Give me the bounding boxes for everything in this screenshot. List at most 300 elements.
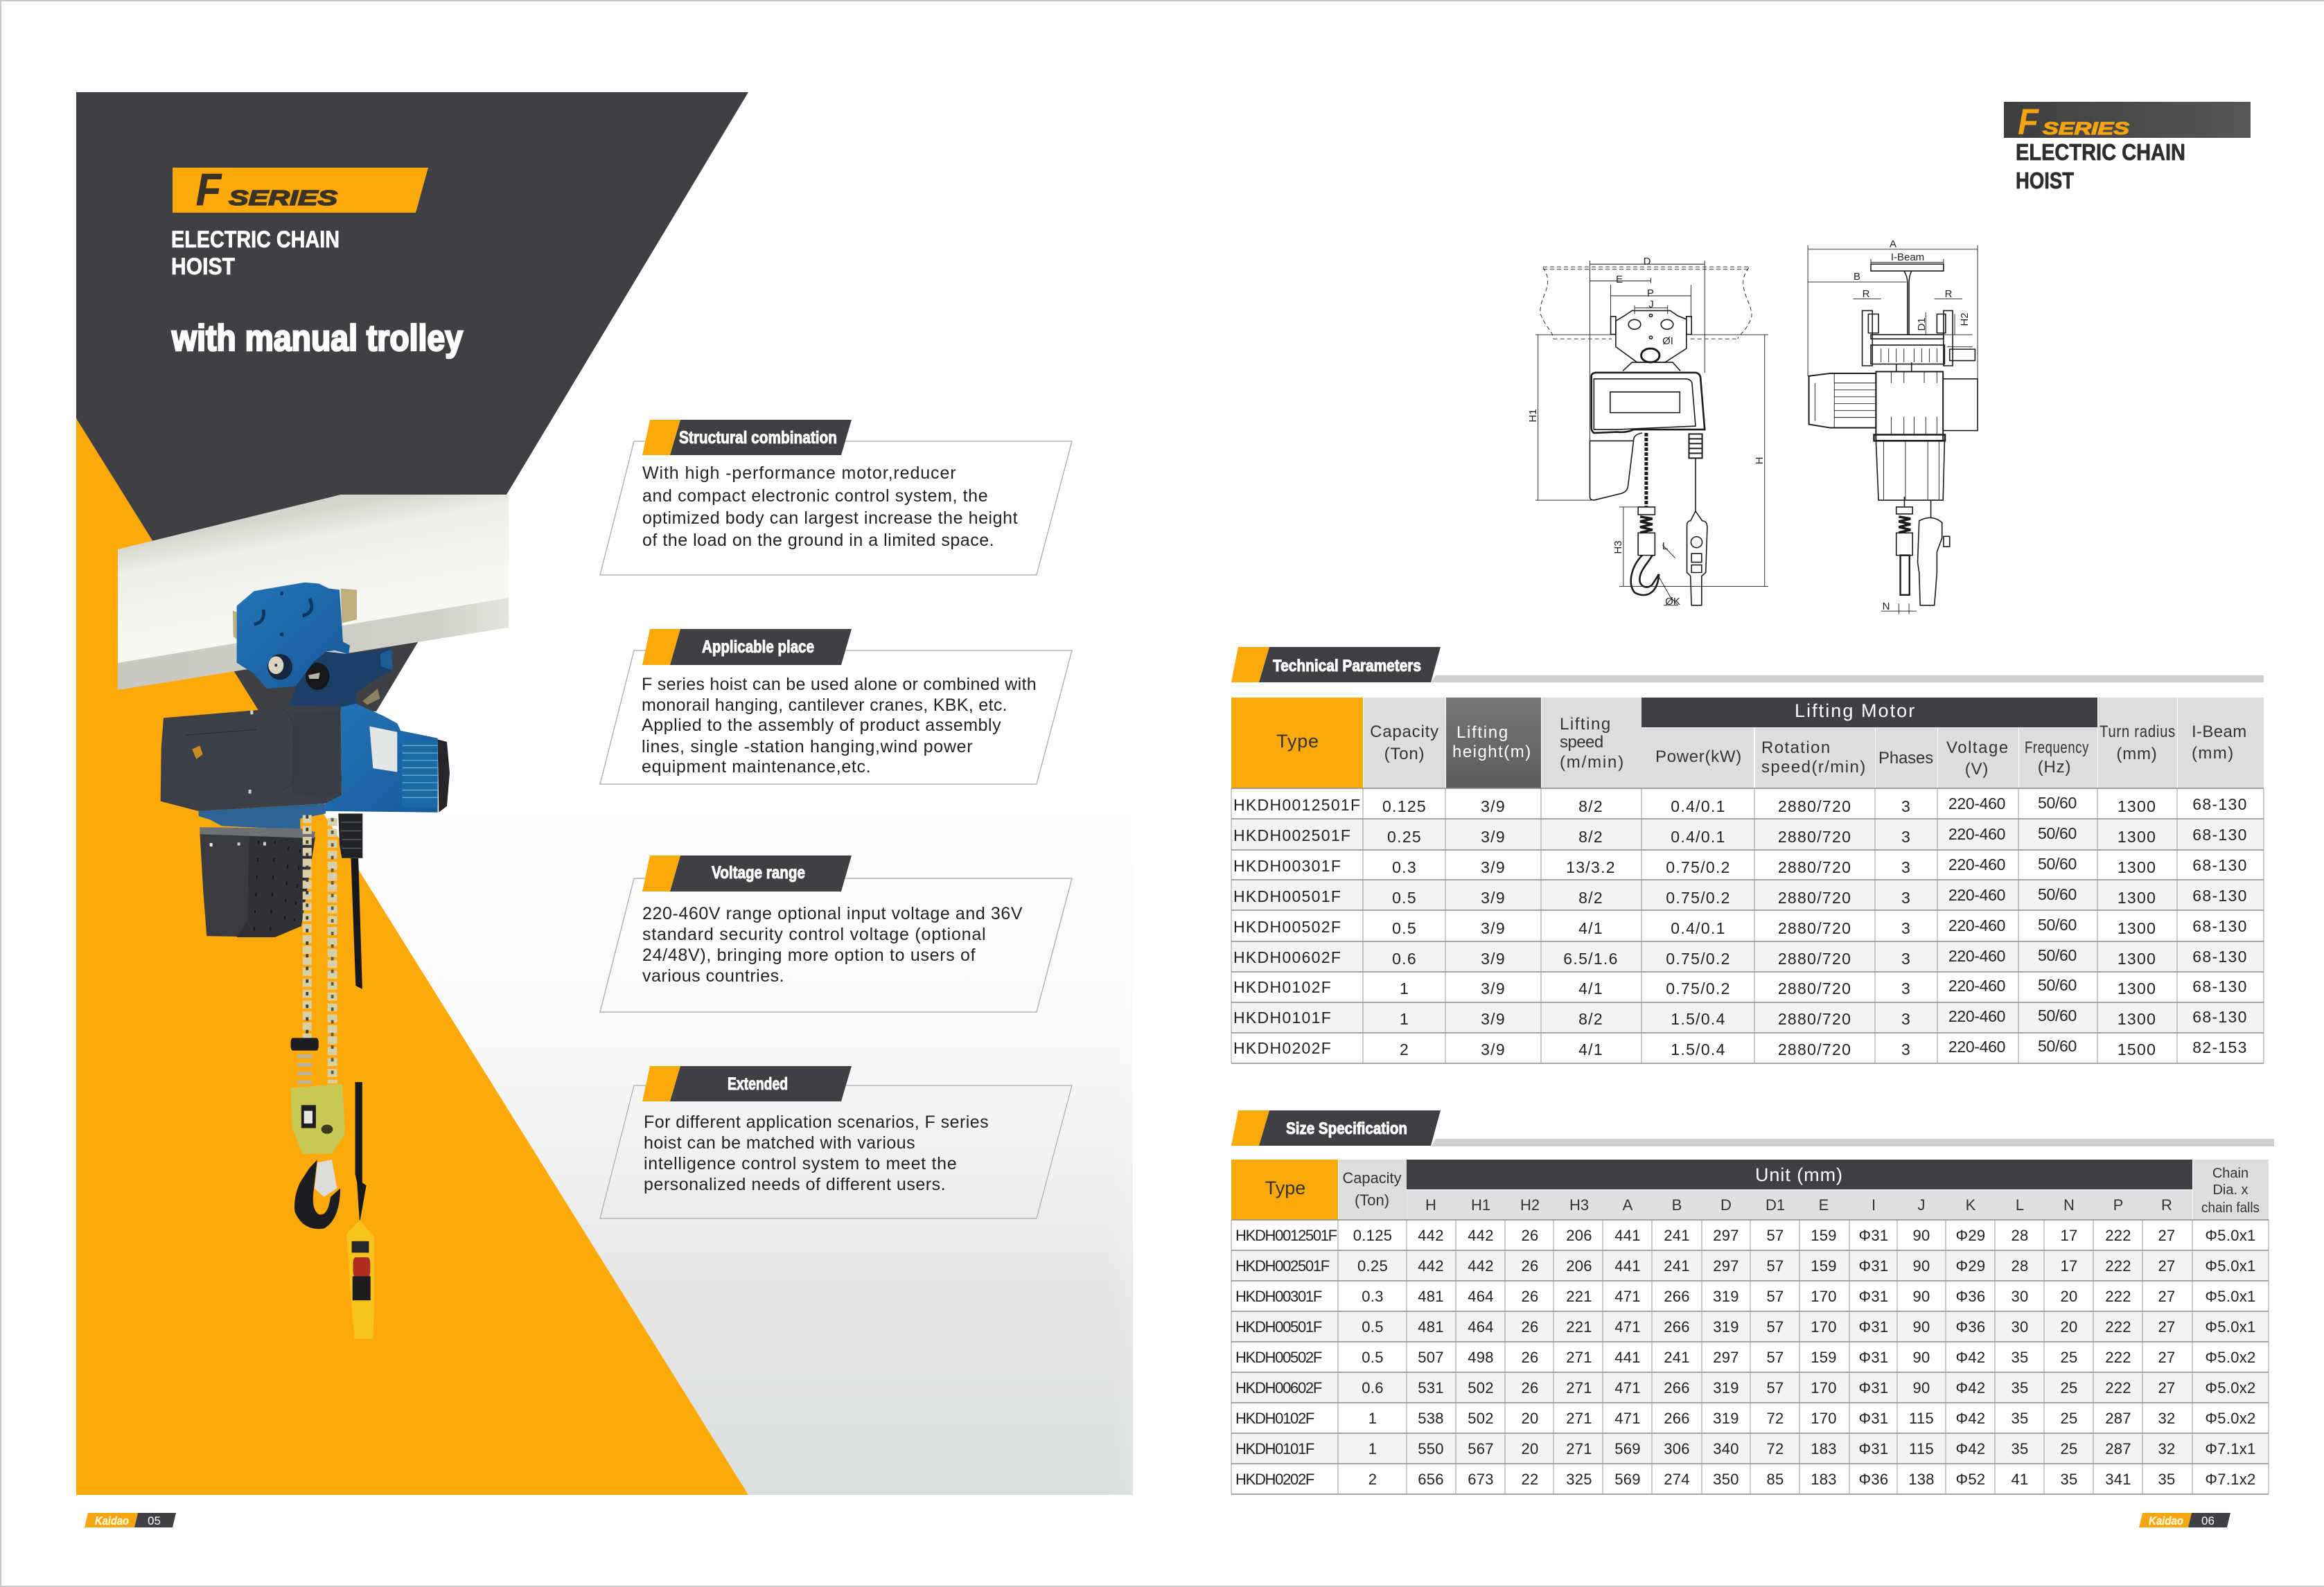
- row HKDH00502F: 35: [2011, 1349, 2029, 1366]
- image: blue electric chain hoist with trolley: [161, 583, 450, 1339]
- row HKDH00602F: 26: [1521, 1379, 1539, 1397]
- row HKDH00502F: 0.4/0.1: [1671, 919, 1726, 937]
- row HKDH00301F: 20: [2060, 1288, 2078, 1305]
- table header: [1231, 1160, 2269, 1220]
- table header: B: [1672, 1196, 1682, 1214]
- row HKDH00602F: HKDH00602F: [1235, 1379, 1322, 1397]
- row HKDH00502F: 2880/720: [1778, 919, 1851, 937]
- row HKDH00501F: 0.5: [1392, 889, 1417, 907]
- table header: speed: [1560, 733, 1604, 752]
- callout: extended: Extended: [728, 1074, 788, 1094]
- row HKDH002501F: 8/2: [1578, 828, 1603, 846]
- row HKDH0202F: 1500: [2118, 1040, 2156, 1058]
- callout: applicable place: monorail hanging, cantilever cranes, KBK, etc.: [642, 695, 1007, 715]
- row HKDH0202F: HKDH0202F: [1233, 1039, 1332, 1057]
- row HKDH0202F: 1.5/0.4: [1671, 1040, 1726, 1058]
- callout: extended: [600, 1066, 1072, 1218]
- row HKDH00602F: 220-460: [1948, 947, 2005, 965]
- callout: voltage range: various countries.: [642, 966, 784, 986]
- row HKDH00301F: 222: [2105, 1288, 2131, 1305]
- table header: Capacity: [1343, 1169, 1401, 1187]
- row HKDH00502F: 3: [1901, 919, 1911, 937]
- table header: R: [2161, 1196, 2172, 1214]
- row HKDH00501F: 481: [1418, 1318, 1444, 1336]
- row HKDH00502F: 3/9: [1481, 919, 1506, 937]
- row HKDH00301F: 170: [1811, 1288, 1837, 1305]
- row HKDH0101F: [1235, 1440, 2256, 1457]
- row HKDH00501F: 1300: [2118, 889, 2156, 907]
- row HKDH002501F: 17: [2060, 1257, 2078, 1275]
- row HKDH002501F: 442: [1418, 1257, 1444, 1275]
- row HKDH00301F: 90: [1912, 1288, 1930, 1305]
- footer: page 06 tag: Kaidao: [2149, 1514, 2183, 1527]
- row HKDH0012501F: 8/2: [1578, 797, 1603, 815]
- row HKDH0012501F: 3/9: [1481, 797, 1506, 815]
- row HKDH00301F: HKDH00301F: [1233, 857, 1341, 875]
- callout: structural combination: [600, 420, 1072, 575]
- panel: left page background: [76, 92, 1133, 1495]
- drawing dimension labels: L: [1662, 540, 1668, 552]
- callout: applicable place: F series hoist can be used alone or combined with: [642, 675, 1037, 694]
- row HKDH00502F: 27: [2158, 1349, 2176, 1366]
- row HKDH0101F: 3: [1901, 1010, 1911, 1028]
- row HKDH00602F: 3/9: [1481, 950, 1506, 968]
- row HKDH00602F: Φ5.0x2: [2205, 1379, 2256, 1397]
- row HKDH00602F: 271: [1566, 1379, 1592, 1397]
- row HKDH00501F: 0.75/0.2: [1666, 889, 1731, 907]
- row HKDH0101F: 20: [1521, 1440, 1539, 1457]
- row HKDH002501F: 3/9: [1481, 828, 1506, 846]
- row HKDH0101F: 550: [1418, 1440, 1444, 1457]
- drawing dimension labels: D: [1644, 256, 1651, 267]
- row HKDH002501F: 220-460: [1948, 825, 2005, 843]
- subheading: with manual trolley: with manual trolley: [171, 318, 463, 359]
- callout: extended: personalized needs of different users.: [644, 1175, 946, 1194]
- row HKDH0012501F: 159: [1811, 1227, 1837, 1244]
- row HKDH00602F: Φ31: [1859, 1379, 1888, 1397]
- callout: structural combination: Structural combination: [679, 428, 837, 447]
- row HKDH00501F: 3/9: [1481, 889, 1506, 907]
- row HKDH00602F: 0.6: [1392, 950, 1417, 968]
- row HKDH00602F: [1233, 946, 2248, 968]
- orange diagonal shape: [76, 418, 748, 1495]
- row HKDH00501F: 464: [1468, 1318, 1494, 1336]
- drawing dimension labels: N: [1883, 601, 1890, 612]
- row HKDH00301F: 0.3: [1392, 858, 1417, 876]
- heading: electric chain hoist: ELECTRIC CHAIN: [171, 227, 340, 253]
- row HKDH0101F: 68-130: [2192, 1008, 2248, 1026]
- row HKDH00301F: HKDH00301F: [1235, 1288, 1322, 1305]
- row HKDH00602F: 531: [1418, 1379, 1444, 1397]
- series tag: F series top right: [2004, 102, 2251, 143]
- row HKDH00502F: [1235, 1349, 2256, 1366]
- row HKDH0012501F: 28: [2011, 1227, 2029, 1244]
- row HKDH0101F: 72: [1766, 1440, 1784, 1457]
- callout: voltage range: standard security control voltage (optional: [642, 925, 986, 944]
- drawing dimension labels: H3: [1612, 540, 1624, 554]
- row HKDH0101F: 115: [1909, 1440, 1934, 1457]
- row HKDH0202F: 50/60: [2038, 1037, 2077, 1055]
- drawing dimension labels: P: [1647, 287, 1654, 299]
- row HKDH002501F: 0.25: [1387, 828, 1422, 846]
- row HKDH00602F: 266: [1664, 1379, 1690, 1397]
- table header: Type: [1276, 731, 1319, 752]
- drawing dimension labels: H: [1754, 457, 1766, 464]
- callout: applicable place: [600, 629, 1072, 784]
- callout: voltage range: 220-460V range optional input voltage and 36V: [642, 904, 1023, 923]
- series tag: F series top right: SERIES: [2043, 119, 2129, 139]
- row HKDH0101F: 3/9: [1481, 1010, 1506, 1028]
- row HKDH00602F: Φ42: [1956, 1379, 1985, 1397]
- table: size specification: [1231, 1160, 2269, 1494]
- row HKDH00602F: 471: [1614, 1379, 1641, 1397]
- row HKDH00501F: 68-130: [2192, 887, 2248, 905]
- drawing dimension labels: H1: [1527, 409, 1539, 423]
- row HKDH0102F: 35: [2011, 1410, 2029, 1427]
- row HKDH0101F: 32: [2158, 1440, 2176, 1457]
- row HKDH002501F: 57: [1766, 1257, 1784, 1275]
- footer: page 05 tag: [85, 1513, 176, 1527]
- row HKDH00501F: 471: [1614, 1318, 1641, 1336]
- row HKDH002501F: 2880/720: [1778, 828, 1851, 846]
- table: technical parameters: [1231, 698, 2264, 1063]
- row HKDH00502F: 90: [1912, 1349, 1930, 1366]
- table header: I: [1872, 1196, 1876, 1214]
- table header: J: [1918, 1196, 1925, 1214]
- row HKDH00502F: 220-460: [1948, 916, 2005, 934]
- row HKDH0202F: 350: [1713, 1471, 1739, 1488]
- row HKDH0012501F: 442: [1468, 1227, 1494, 1244]
- row HKDH00502F: 441: [1614, 1349, 1641, 1366]
- row HKDH00502F: 507: [1418, 1349, 1444, 1366]
- row HKDH00301F: 221: [1566, 1288, 1592, 1305]
- row HKDH0101F: 220-460: [1948, 1007, 2005, 1025]
- hook: [294, 1160, 340, 1229]
- heading: electric chain hoist top right: HOIST: [2016, 168, 2074, 193]
- table header: (Ton): [1384, 745, 1425, 763]
- row HKDH0012501F: 27: [2158, 1227, 2176, 1244]
- row HKDH00301F: 26: [1521, 1288, 1539, 1305]
- alternate row shading: [1231, 1250, 2269, 1464]
- row HKDH0102F: Φ31: [1859, 1410, 1888, 1427]
- row HKDH00502F: Φ42: [1956, 1349, 1985, 1366]
- row HKDH0202F: 82-153: [2192, 1038, 2248, 1056]
- row HKDH0102F: 32: [2158, 1410, 2176, 1427]
- callout: applicable place: Applicable place: [702, 637, 814, 657]
- row HKDH0102F: Φ5.0x2: [2205, 1410, 2256, 1427]
- row HKDH0101F: 1.5/0.4: [1671, 1010, 1726, 1028]
- row HKDH0012501F: 441: [1614, 1227, 1641, 1244]
- technical drawing: side view: [1808, 245, 1978, 614]
- row HKDH00602F: 68-130: [2192, 948, 2248, 966]
- drawing dimension labels: E: [1616, 274, 1623, 285]
- drawing dimension labels: D1: [1916, 317, 1928, 331]
- blue strip under control box: [199, 804, 326, 830]
- row HKDH0012501F: 17: [2060, 1227, 2078, 1244]
- row HKDH00602F: 2880/720: [1778, 950, 1851, 968]
- row HKDH002501F: 90: [1912, 1257, 1930, 1275]
- row HKDH0202F: 183: [1811, 1471, 1837, 1488]
- drawing dimension labels: H2: [1959, 312, 1971, 326]
- row HKDH00301F: 1300: [2118, 858, 2156, 876]
- row HKDH00502F: 4/1: [1578, 919, 1603, 937]
- table header: A: [1623, 1196, 1633, 1214]
- power cable: [351, 858, 362, 989]
- row HKDH00501F: 27: [2158, 1318, 2176, 1336]
- row HKDH0202F: 673: [1468, 1471, 1494, 1488]
- row HKDH0102F: 3: [1901, 979, 1911, 998]
- row HKDH002501F: [1233, 824, 2248, 846]
- row HKDH00502F: 26: [1521, 1349, 1539, 1366]
- row HKDH0102F: HKDH0102F: [1235, 1410, 1314, 1427]
- callout: structural combination: With high -performance motor,reducer: [642, 463, 956, 483]
- table header: H3: [1569, 1196, 1589, 1214]
- row HKDH00301F: 0.75/0.2: [1666, 858, 1731, 876]
- row HKDH0102F: 0.75/0.2: [1666, 979, 1731, 998]
- row HKDH0202F: [1233, 1037, 2248, 1058]
- row HKDH0101F: [1233, 1007, 2248, 1028]
- table header: Frequency: [2025, 738, 2089, 757]
- row HKDH0102F: 319: [1713, 1410, 1739, 1427]
- row HKDH00301F: 220-460: [1948, 855, 2005, 874]
- heading: electric chain hoist top right: ELECTRIC CHAIN: [2016, 139, 2185, 165]
- row HKDH0012501F: [1235, 1227, 2256, 1244]
- title block: F series banner: SERIES: [229, 186, 337, 210]
- row HKDH00301F: 3/9: [1481, 858, 1506, 876]
- row HKDH00502F: 1300: [2118, 919, 2156, 937]
- row HKDH0101F: 35: [2011, 1440, 2029, 1457]
- row HKDH0012501F: 442: [1418, 1227, 1444, 1244]
- row HKDH0102F: 1: [1400, 979, 1409, 998]
- row HKDH00502F: HKDH00502F: [1235, 1349, 1322, 1366]
- row HKDH0101F: 287: [2105, 1440, 2131, 1457]
- bellows: [338, 814, 362, 858]
- row HKDH002501F: 28: [2011, 1257, 2029, 1275]
- row HKDH002501F: 206: [1566, 1257, 1592, 1275]
- row HKDH0101F: HKDH0101F: [1233, 1009, 1332, 1027]
- row HKDH00501F: 222: [2105, 1318, 2131, 1336]
- table header: [1231, 698, 2264, 788]
- table header: K: [1966, 1196, 1976, 1214]
- row HKDH00602F: 35: [2011, 1379, 2029, 1397]
- drawing dimension labels: A: [1890, 238, 1896, 250]
- row HKDH00501F: 90: [1912, 1318, 1930, 1336]
- row HKDH002501F: Φ29: [1956, 1257, 1985, 1275]
- row HKDH00301F: 68-130: [2192, 856, 2248, 874]
- row HKDH002501F: 222: [2105, 1257, 2131, 1275]
- table header: Lifting Motor: [1795, 700, 1915, 721]
- row HKDH00602F: 3: [1901, 950, 1911, 968]
- row HKDH002501F: 3: [1901, 828, 1911, 846]
- row HKDH0102F: 50/60: [2038, 976, 2077, 994]
- heading: electric chain hoist: [171, 227, 340, 280]
- row HKDH0102F: 20: [1521, 1410, 1539, 1427]
- row HKDH00502F: 25: [2060, 1349, 2078, 1366]
- table header: E: [1819, 1196, 1829, 1214]
- footer: page 06 tag: [2139, 1513, 2230, 1527]
- row HKDH00501F: [1235, 1318, 2256, 1336]
- row HKDH0202F: HKDH0202F: [1235, 1471, 1314, 1488]
- row HKDH002501F: 297: [1713, 1257, 1739, 1275]
- row HKDH0101F: 569: [1614, 1440, 1641, 1457]
- footer: page 06 tag: 06: [2201, 1514, 2215, 1527]
- drawing dimension labels: ØK: [1665, 596, 1680, 608]
- row HKDH00501F: 20: [2060, 1318, 2078, 1336]
- row HKDH0101F: Φ42: [1956, 1440, 1985, 1457]
- row HKDH00602F: HKDH00602F: [1233, 948, 1341, 966]
- drawing dimension labels: R: [1863, 288, 1870, 300]
- table header: Lifting: [1560, 715, 1611, 734]
- row HKDH00502F: 68-130: [2192, 917, 2248, 935]
- row HKDH00602F: 1300: [2118, 950, 2156, 968]
- footer: page 05 tag: Kaidao: [95, 1514, 129, 1527]
- row HKDH0101F: 306: [1664, 1440, 1690, 1457]
- row HKDH0102F: [1233, 976, 2248, 998]
- row HKDH00301F: 319: [1713, 1288, 1739, 1305]
- row HKDH0102F: 220-460: [1948, 977, 2005, 995]
- row HKDH0202F: [1235, 1471, 2256, 1488]
- row HKDH00502F: HKDH00502F: [1233, 918, 1341, 936]
- row HKDH0102F: Φ42: [1956, 1410, 1985, 1427]
- row HKDH0102F: 115: [1909, 1410, 1934, 1427]
- table header: chain falls: [2201, 1200, 2260, 1216]
- section header: technical parameters: [1231, 647, 2264, 682]
- drawing dimension labels: B: [1854, 271, 1860, 283]
- row HKDH00301F: 471: [1614, 1288, 1641, 1305]
- row HKDH0202F: 2880/720: [1778, 1040, 1851, 1058]
- callout: extended: hoist can be matched with various: [644, 1133, 915, 1153]
- row HKDH0101F: Φ7.1x1: [2205, 1440, 2256, 1457]
- table header: Capacity: [1370, 722, 1439, 741]
- row HKDH00301F: 481: [1418, 1288, 1444, 1305]
- row HKDH0202F: 2: [1400, 1040, 1409, 1058]
- callout: applicable place: lines, single -station hanging,wind power: [642, 737, 973, 756]
- row HKDH0012501F: 68-130: [2192, 795, 2248, 813]
- row HKDH00501F: 2880/720: [1778, 889, 1851, 907]
- row HKDH0012501F: HKDH0012501F: [1235, 1227, 1337, 1244]
- row HKDH0101F: 340: [1713, 1440, 1739, 1457]
- row HKDH00501F: 26: [1521, 1318, 1539, 1336]
- table header: Dia. x: [2212, 1182, 2248, 1198]
- row HKDH0102F: 72: [1766, 1410, 1784, 1427]
- row HKDH00602F: 57: [1766, 1379, 1784, 1397]
- row HKDH0012501F: Φ31: [1859, 1227, 1888, 1244]
- row HKDH0012501F: 1300: [2118, 797, 2156, 815]
- row HKDH002501F: 241: [1664, 1257, 1690, 1275]
- row HKDH00301F: 50/60: [2038, 855, 2077, 873]
- table header: (m/min): [1560, 753, 1624, 772]
- row HKDH002501F: 50/60: [2038, 824, 2077, 842]
- row HKDH002501F: HKDH002501F: [1233, 826, 1351, 844]
- row HKDH0012501F: Φ29: [1956, 1227, 1985, 1244]
- row HKDH00602F: 170: [1811, 1379, 1837, 1397]
- row HKDH002501F: 27: [2158, 1257, 2176, 1275]
- row HKDH00501F: 266: [1664, 1318, 1690, 1336]
- row HKDH00501F: 170: [1811, 1318, 1837, 1336]
- row HKDH0202F: 325: [1566, 1471, 1592, 1488]
- row HKDH0102F: 538: [1418, 1410, 1444, 1427]
- row HKDH00501F: 221: [1566, 1318, 1592, 1336]
- row HKDH0012501F: HKDH0012501F: [1233, 796, 1361, 814]
- row HKDH00501F: Φ5.0x1: [2205, 1318, 2256, 1336]
- row HKDH0012501F: 3: [1901, 797, 1911, 815]
- heading: electric chain hoist: HOIST: [171, 254, 235, 280]
- row HKDH0101F: Φ31: [1859, 1440, 1888, 1457]
- row HKDH00502F: 159: [1811, 1349, 1837, 1366]
- row HKDH00301F: [1233, 855, 2248, 876]
- row HKDH0202F: 4/1: [1578, 1040, 1603, 1058]
- row HKDH0101F: HKDH0101F: [1235, 1440, 1314, 1457]
- series tag: F series top right: F: [2018, 102, 2040, 143]
- row HKDH002501F: HKDH002501F: [1235, 1257, 1330, 1275]
- row HKDH00602F: 50/60: [2038, 946, 2077, 964]
- section header: technical parameters: Technical Parameters: [1273, 657, 1421, 675]
- row HKDH002501F: 1300: [2118, 828, 2156, 846]
- callout: structural combination: optimized body can largest increase the height: [642, 508, 1018, 528]
- row HKDH0202F: Φ7.1x2: [2205, 1471, 2256, 1488]
- table header: H: [1425, 1196, 1436, 1214]
- row HKDH00301F: 57: [1766, 1288, 1784, 1305]
- row HKDH00502F: 297: [1713, 1349, 1739, 1366]
- row HKDH00502F: Φ31: [1859, 1349, 1888, 1366]
- row HKDH0101F: 1300: [2118, 1010, 2156, 1028]
- table header: Rotation: [1761, 738, 1831, 757]
- row HKDH0012501F: 206: [1566, 1227, 1592, 1244]
- row HKDH0012501F: 220-460: [1948, 795, 2005, 813]
- table header: speed(r/min): [1761, 758, 1866, 777]
- row HKDH00301F: 3: [1901, 858, 1911, 876]
- hoist body: trolley, motor, control box, chain bag: [161, 583, 450, 937]
- table header: (Ton): [1355, 1191, 1389, 1209]
- row HKDH0202F: 569: [1614, 1471, 1641, 1488]
- row HKDH0012501F: 297: [1713, 1227, 1739, 1244]
- table header: Lifting: [1456, 723, 1508, 742]
- table header: H1: [1471, 1196, 1490, 1214]
- table header: Voltage: [1946, 738, 2009, 757]
- row HKDH0012501F: 0.125: [1353, 1227, 1392, 1244]
- row HKDH0012501F: 57: [1766, 1227, 1784, 1244]
- callout: applicable place: Applied to the assembly of product assembly: [642, 716, 1001, 735]
- row HKDH0012501F: 90: [1912, 1227, 1930, 1244]
- row HKDH0101F: 1: [1368, 1440, 1377, 1457]
- row HKDH00602F: 319: [1713, 1379, 1739, 1397]
- table header: L: [2016, 1196, 2024, 1214]
- row HKDH0102F: 25: [2060, 1410, 2078, 1427]
- row HKDH0102F: 502: [1468, 1410, 1494, 1427]
- row HKDH00502F: 50/60: [2038, 916, 2077, 934]
- row HKDH0202F: 2: [1368, 1471, 1377, 1488]
- row HKDH0102F: 266: [1664, 1410, 1690, 1427]
- row HKDH0012501F: 241: [1664, 1227, 1690, 1244]
- row HKDH0101F: 25: [2060, 1440, 2078, 1457]
- footer: page 05 tag: 05: [148, 1514, 161, 1527]
- row HKDH00501F: Φ31: [1859, 1318, 1888, 1336]
- table header: H2: [1520, 1196, 1540, 1214]
- row HKDH0102F: [1235, 1410, 2256, 1427]
- table header: Power(kW): [1655, 747, 1742, 766]
- chain bag: [200, 832, 314, 937]
- callout: voltage range: [600, 855, 1072, 1012]
- row HKDH002501F: [1235, 1257, 2256, 1275]
- table header: (V): [1965, 760, 1989, 779]
- row HKDH0202F: Φ52: [1956, 1471, 1985, 1488]
- row HKDH00301F: Φ36: [1956, 1288, 1985, 1305]
- row HKDH00501F: 220-460: [1948, 886, 2005, 904]
- row HKDH00501F: 3: [1901, 889, 1911, 907]
- row HKDH00301F: Φ31: [1859, 1288, 1888, 1305]
- row HKDH0202F: 41: [2011, 1471, 2029, 1488]
- row HKDH0012501F: 0.4/0.1: [1671, 797, 1726, 815]
